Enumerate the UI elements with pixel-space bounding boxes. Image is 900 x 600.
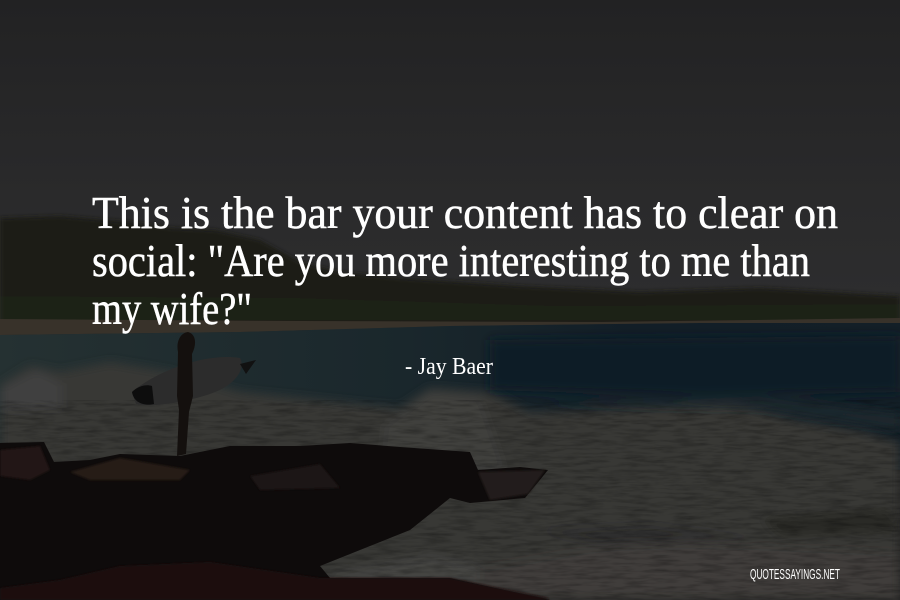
background photo: foam texture: [0, 400, 900, 600]
quote line 2: social: "Are you more interesting to me than: [92, 235, 810, 286]
background photo: headland: [0, 216, 900, 325]
background photo: beach: [0, 318, 900, 335]
background photo: sky: [0, 0, 900, 330]
attribution: - Jay Baer: [405, 354, 493, 380]
quote line 3: my wife?": [92, 283, 252, 334]
quote text: [92, 187, 838, 334]
background photo: surfer with board: [132, 332, 256, 456]
background photo: sea: [0, 323, 900, 470]
background photo: dark water bands: [490, 336, 900, 430]
background photo: rocks: [0, 442, 550, 600]
quote line 1: This is the bar your content has to clear on: [92, 187, 838, 238]
background photo: breaking waves: [0, 362, 900, 600]
